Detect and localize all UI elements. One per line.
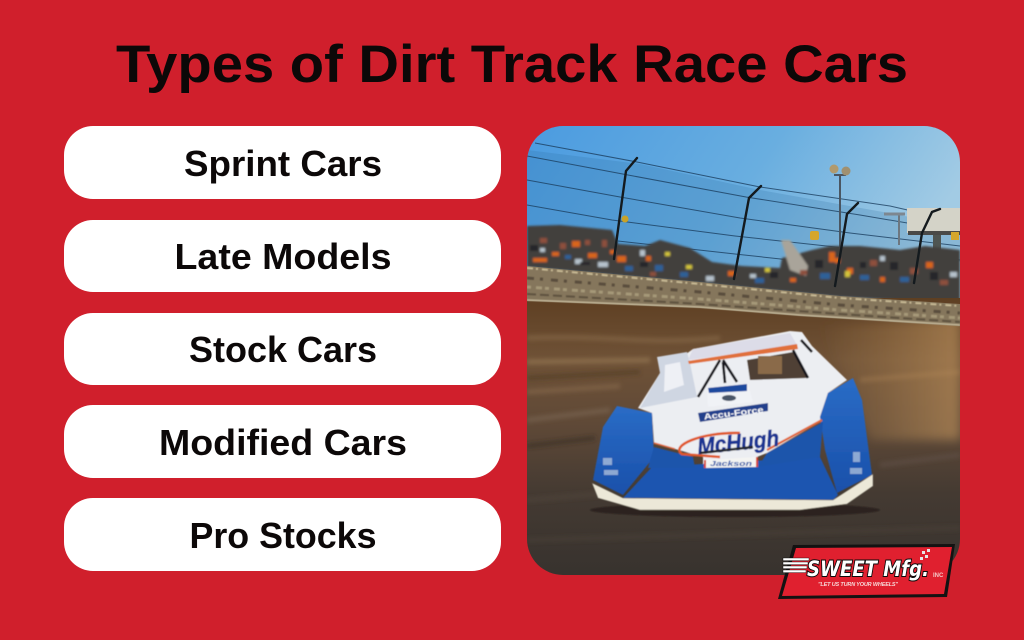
Accu-Force decal	[698, 403, 768, 422]
air box	[707, 383, 753, 407]
yellow signs	[622, 216, 959, 240]
crowd in the grandstand	[527, 225, 960, 304]
logo badge	[778, 544, 955, 599]
sky	[527, 126, 960, 316]
checkered flag	[920, 549, 930, 560]
list item: Pro Stocks	[64, 498, 501, 571]
car shadow	[590, 505, 880, 518]
McHugh logo: McHugh	[696, 425, 780, 459]
crumpled rear panel	[640, 352, 697, 408]
list item: Stock Cars: Stock Cars	[189, 329, 377, 370]
speed stripes	[783, 558, 809, 573]
race car	[590, 331, 880, 517]
small light pole	[884, 214, 905, 245]
lower blue nose	[623, 457, 838, 500]
list item: Sprint Cars: Sprint Cars	[184, 143, 382, 184]
list item: Sprint Cars	[64, 126, 501, 199]
cockpit window	[747, 352, 807, 380]
race car: Accu-Force	[703, 404, 764, 422]
list item: Pro Stocks: Pro Stocks	[190, 515, 376, 556]
title: Types of Dirt Track Race Cars	[116, 35, 908, 94]
fence posts	[614, 158, 940, 286]
side sponsor decals	[603, 452, 862, 475]
photo: late model race car on dirt track	[527, 126, 960, 578]
dirt berm	[527, 266, 960, 326]
track grooves	[527, 334, 956, 466]
spoiler edge	[688, 344, 798, 364]
light pole	[830, 164, 850, 250]
number panel	[705, 460, 757, 469]
orange swoosh	[654, 443, 675, 449]
logo: Sweet Mfg	[778, 544, 955, 599]
list item: Late Models	[64, 220, 501, 292]
right blue fender	[820, 378, 872, 493]
billboard	[907, 208, 960, 250]
struts	[698, 340, 812, 397]
dirt track surface	[527, 298, 960, 578]
dust cloud	[842, 321, 960, 446]
list item: Modified Cars: Modified Cars	[159, 422, 407, 463]
front splitter	[592, 474, 873, 510]
catch fence netting	[527, 143, 960, 270]
white hood and body	[638, 331, 847, 468]
list item: Late Models: Late Models	[174, 236, 392, 277]
list item: Modified Cars	[64, 405, 501, 478]
logo INC: INC	[933, 573, 944, 579]
roof	[688, 333, 797, 360]
list of race car types	[64, 126, 501, 571]
logo tagline: "LET US TURN YOUR WHEELS"	[818, 582, 898, 588]
logo wordmark: SWEET Mfg.	[807, 557, 929, 581]
race car: Jackson	[710, 461, 752, 468]
list item: Stock Cars	[64, 313, 501, 385]
left blue fender	[593, 406, 654, 495]
